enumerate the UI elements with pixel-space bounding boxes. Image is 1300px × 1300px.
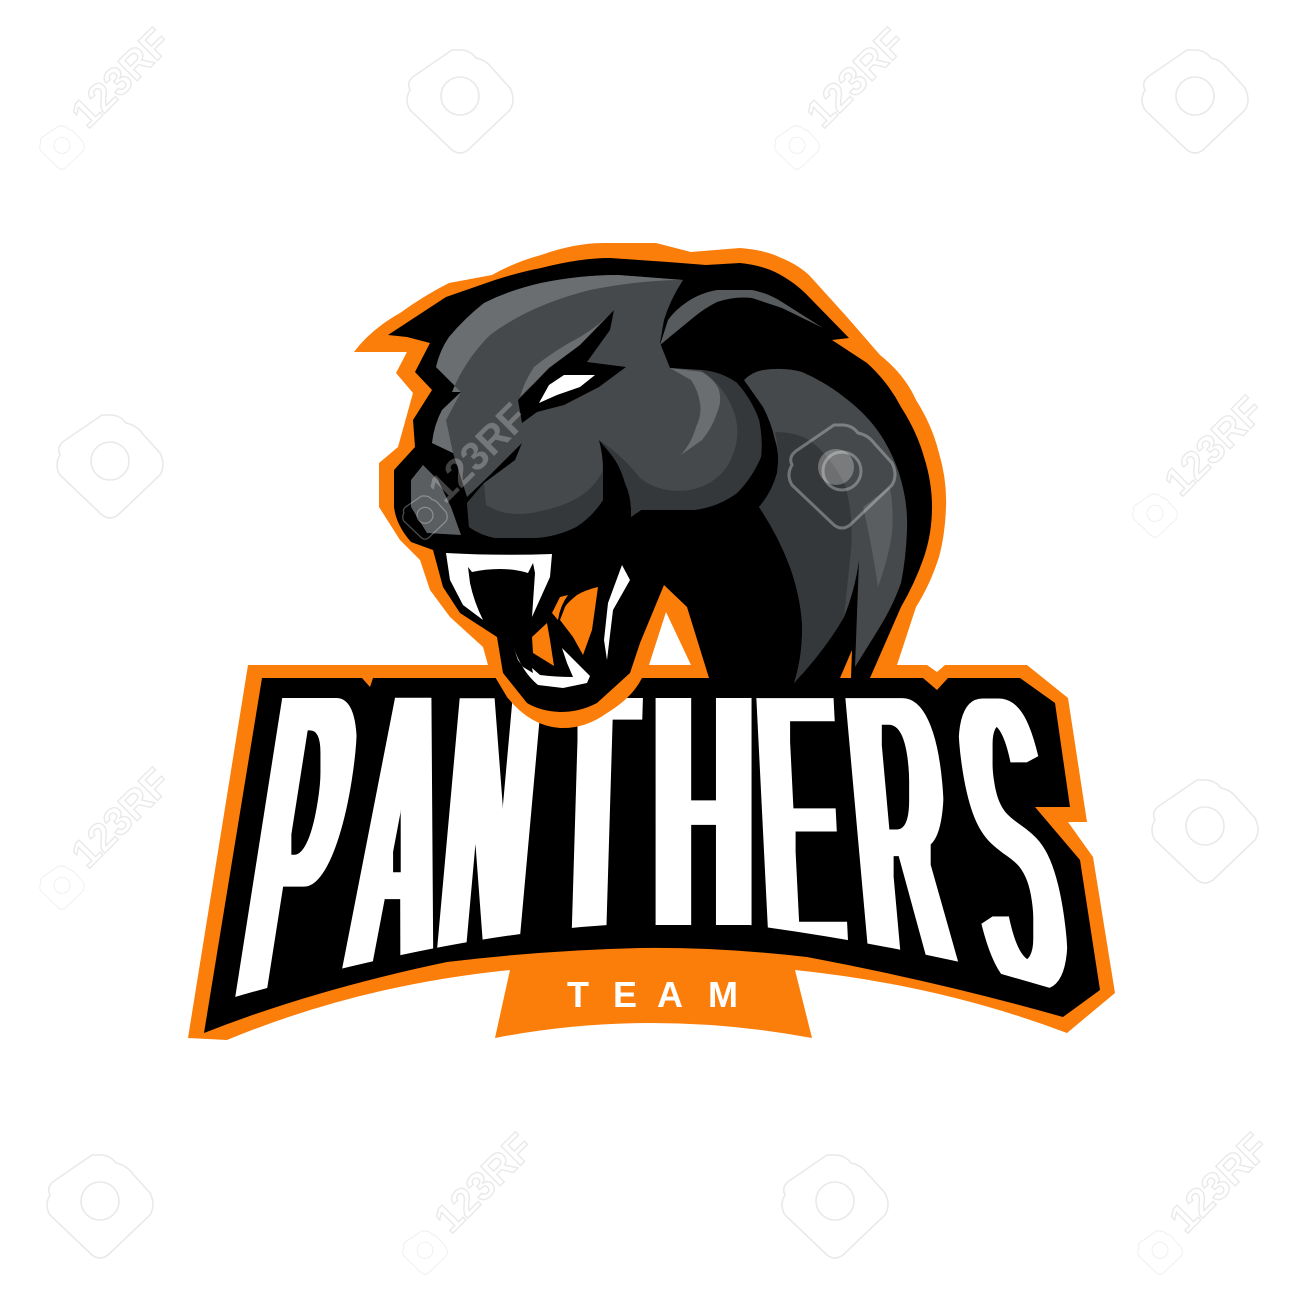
watermark: row four right xyxy=(1138,1125,1277,1274)
watermark: row four right: 123RF xyxy=(1161,1125,1277,1241)
mouth: right fang xyxy=(604,565,630,660)
banner: black inner shape xyxy=(204,678,1100,1033)
ribbon label: TEAM: TEAM xyxy=(567,974,738,1015)
watermark: row two far right xyxy=(1133,388,1272,537)
watermark on head: mane camera xyxy=(789,425,895,528)
mouth: tongue sliver xyxy=(552,595,568,620)
watermark: row three left: 123RF xyxy=(63,760,179,876)
face: brow highlight xyxy=(520,310,614,397)
letter T: T xyxy=(546,608,639,1025)
watermark: row four centre-left xyxy=(403,1125,542,1274)
watermark: top centre-left xyxy=(407,50,513,153)
panther head mascot xyxy=(354,243,946,728)
letter P: P xyxy=(216,588,380,1110)
letter H: H xyxy=(654,607,753,1025)
letter A: A xyxy=(333,596,465,1077)
eye: black outline xyxy=(518,310,626,423)
mane: main grey xyxy=(744,369,907,683)
face: main grey xyxy=(432,275,762,538)
letter N: N xyxy=(428,603,551,1044)
wordmark: PANTHERS xyxy=(235,698,1068,997)
head: gap triangle xyxy=(649,612,691,665)
watermark: top right xyxy=(1142,50,1248,153)
watermark: top centre-right: 123RF xyxy=(798,20,914,136)
mane: top swoosh xyxy=(660,290,823,345)
watermark: top centre-right xyxy=(775,20,914,169)
face: dark cheek shading xyxy=(599,370,762,517)
face: forehead highlight xyxy=(436,275,683,392)
letter E: E xyxy=(751,604,850,1038)
watermark: top left: 123RF xyxy=(63,20,179,136)
mane: light streak xyxy=(863,487,893,587)
head: black silhouette xyxy=(388,258,932,712)
mouth: upper teeth xyxy=(446,553,552,620)
banner: orange outer shape xyxy=(188,665,1115,1040)
watermark: row three right xyxy=(1152,780,1258,883)
mouth: lower teeth xyxy=(513,646,590,688)
watermark: row four left xyxy=(47,1155,153,1258)
letter S: S xyxy=(938,597,1086,1088)
watermark: row four centre-right xyxy=(782,1155,888,1258)
face: muzzle lower shade xyxy=(467,470,603,538)
face: left nose highlight xyxy=(432,392,461,453)
face: nose xyxy=(411,465,461,535)
head: orange outline xyxy=(354,243,946,728)
watermark: row two far right: 123RF xyxy=(1156,388,1272,504)
mouth: tongue upper xyxy=(560,587,598,655)
eye: white xyxy=(539,375,595,403)
mouth: tongue lower xyxy=(532,623,554,666)
mane: dark lower shade xyxy=(759,432,852,683)
face: cheek highlight xyxy=(670,368,720,455)
watermark: row four centre-left: 123RF xyxy=(426,1125,542,1241)
watermark: row three left xyxy=(40,760,179,909)
watermark on head: nose: 123RF xyxy=(420,395,536,511)
letter R: R xyxy=(835,598,967,1064)
watermark: top left xyxy=(40,20,179,169)
watermark: row two left xyxy=(57,415,163,518)
mane: orange sliver xyxy=(840,650,852,678)
